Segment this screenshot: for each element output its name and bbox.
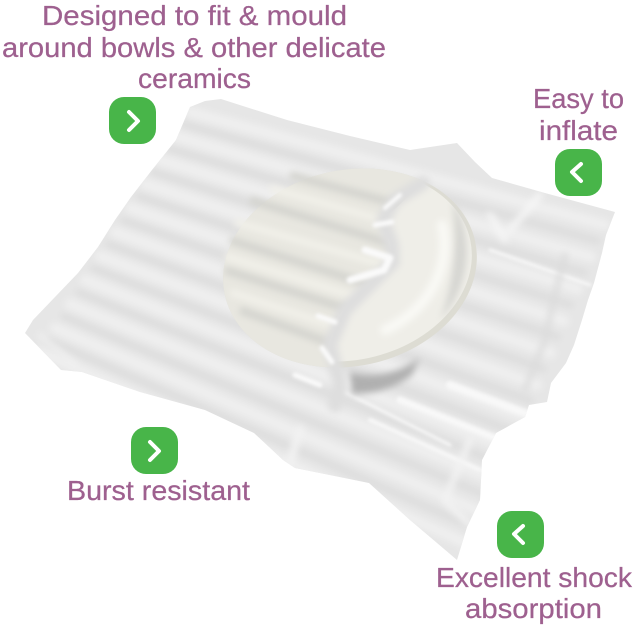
bowl interior — [208, 148, 490, 384]
callout text — [2, 0, 386, 94]
wrap body — [25, 99, 615, 560]
icon: left chevron button — [497, 511, 544, 558]
bright tube highlights lower right — [345, 250, 590, 470]
callout text: absorption — [465, 593, 602, 624]
callout text — [436, 562, 633, 624]
callout: burst resistant — [67, 427, 250, 506]
callout: easy to inflate — [533, 83, 624, 196]
callout: designed to fit — [2, 0, 386, 144]
callout text: Easy to — [533, 83, 624, 114]
air column wrap — [25, 99, 615, 560]
callout text — [533, 83, 624, 146]
callout text: around bowls & other delicate — [2, 32, 386, 63]
callout text: Designed to fit & mould — [42, 0, 347, 31]
callout text: inflate — [539, 115, 618, 146]
callout text: Burst resistant — [67, 475, 250, 506]
crumpled fold over bowl — [295, 183, 423, 405]
bowl foot shadow — [350, 358, 420, 394]
callout: excellent shock absorption — [436, 511, 633, 624]
wrap layer over bowl — [224, 168, 415, 367]
callout text: Excellent shock — [436, 562, 633, 593]
bowl rim — [204, 146, 496, 390]
icon: left chevron button — [555, 149, 602, 196]
bowl highlight — [385, 225, 444, 330]
bowl — [223, 168, 477, 398]
crumpled end seams — [290, 195, 563, 526]
inflated air tubes — [76, 188, 481, 474]
bowl speckled shade — [440, 200, 467, 320]
icon: right chevron button — [131, 427, 178, 474]
callout text: ceramics — [138, 63, 251, 94]
icon: right chevron button — [109, 97, 156, 144]
